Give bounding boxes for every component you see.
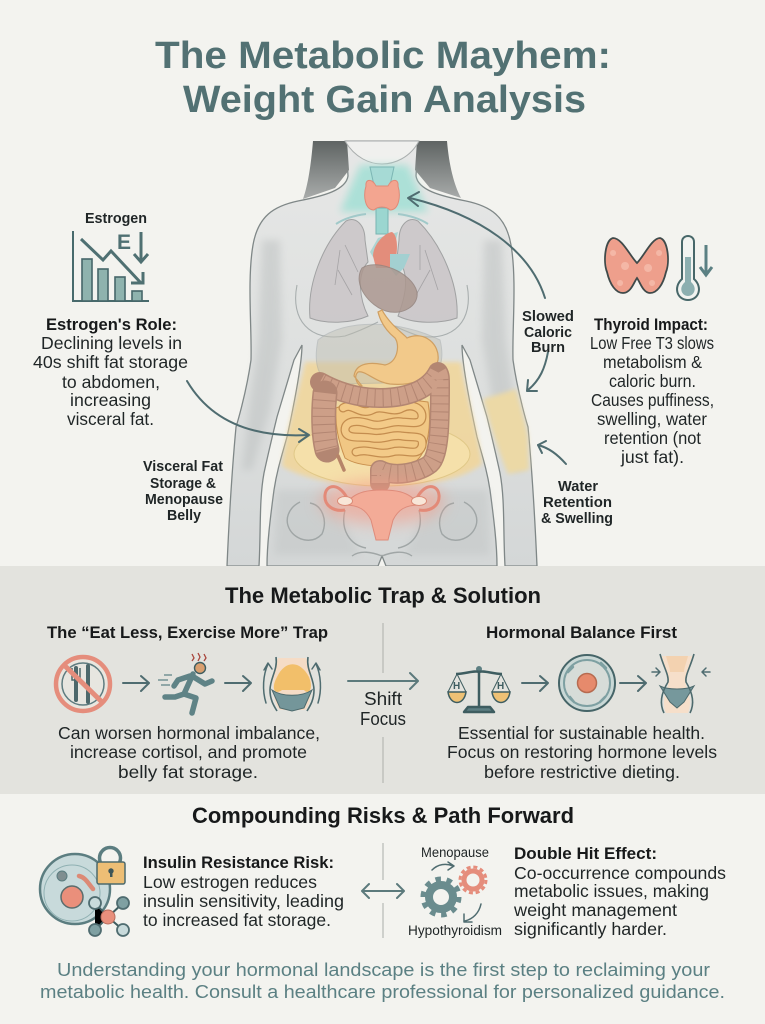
icon: cell bbox=[559, 655, 615, 711]
icon: belly with up arrows bbox=[264, 657, 320, 711]
label: water retention bbox=[541, 479, 613, 527]
label: slowed caloric burn: Slowed bbox=[522, 309, 574, 325]
arrow bbox=[522, 676, 548, 691]
small intestine bbox=[336, 400, 429, 466]
text: double hit: significantly harder. bbox=[514, 919, 667, 939]
text: thyroid impact: Causes puffiness, bbox=[591, 390, 714, 410]
text: insulin resistance: insulin sensitivity, leading bbox=[143, 891, 344, 911]
closing message bbox=[40, 959, 725, 1002]
arrow bbox=[123, 676, 149, 691]
label: visceral fat bbox=[143, 459, 223, 524]
label: visceral fat: Belly bbox=[167, 508, 201, 524]
icon: estrogen declining chart: Estrogen bbox=[85, 211, 147, 227]
arrow: to arm bbox=[527, 352, 548, 391]
trachea and thyroid bbox=[336, 167, 428, 234]
arrow: shift focus bbox=[348, 673, 418, 689]
text: thyroid impact: caloric burn. bbox=[609, 371, 696, 391]
liver and abdominal overlay bbox=[316, 324, 442, 384]
lungs bbox=[310, 220, 457, 322]
anatomical body illustration bbox=[227, 141, 537, 566]
text: trap description: increase cortisol, and promote bbox=[70, 742, 307, 762]
text: thyroid impact: Low Free T3 slows bbox=[590, 333, 714, 353]
text: thyroid impact: just fat). bbox=[620, 447, 684, 467]
icon: balance scales: H bbox=[453, 681, 460, 692]
label: water retention: Retention bbox=[543, 495, 612, 511]
pelvic bones bbox=[287, 502, 477, 556]
icon: estrogen declining chart: E bbox=[117, 231, 131, 254]
arrow bbox=[225, 676, 251, 691]
icon: balance scales: H bbox=[497, 681, 504, 692]
text: thyroid impact: retention (not bbox=[604, 428, 701, 448]
text: thyroid impact: Thyroid Impact: bbox=[594, 315, 708, 334]
closing message: metabolic health. Consult a healthcare professional for personalized guidance. bbox=[40, 981, 725, 1002]
divider bbox=[382, 843, 384, 938]
label: water retention: Water bbox=[558, 479, 598, 495]
subheading: trap: The “Eat Less, Exercise More” Trap bbox=[47, 623, 328, 642]
closing message: Understanding your hormonal landscape is the first step to reclaiming your bbox=[57, 959, 710, 980]
text: estrogen's role: Declining levels in bbox=[41, 333, 182, 353]
text: double hit: metabolic issues, making bbox=[514, 881, 709, 901]
breast contours bbox=[296, 285, 468, 337]
arrow: to water retention bbox=[538, 441, 566, 464]
text: balance description: before restrictive dieting. bbox=[484, 762, 680, 782]
stomach bbox=[354, 310, 438, 386]
uterus glow bbox=[320, 480, 444, 524]
icon: estrogen declining chart bbox=[73, 211, 149, 301]
text: thyroid impact bbox=[590, 315, 714, 467]
text: insulin resistance: to increased fat storage. bbox=[143, 910, 331, 930]
label: menopause: Menopause bbox=[421, 845, 489, 860]
text: trap description: Can worsen hormonal imbalance, bbox=[58, 723, 320, 743]
title: Weight Gain Analysis bbox=[183, 79, 586, 121]
icon: balance scales bbox=[448, 666, 510, 712]
text: insulin resistance: Low estrogen reduces bbox=[143, 872, 317, 892]
text: estrogen's role: 40s shift fat storage bbox=[33, 352, 188, 372]
text: double hit: Co-occurrence compounds bbox=[514, 863, 726, 883]
body silhouette bbox=[227, 141, 537, 566]
label: visceral fat: Storage & bbox=[150, 476, 216, 492]
title: The Metabolic Mayhem: bbox=[155, 35, 611, 77]
text: balance description: Focus on restoring hormone levels bbox=[447, 742, 717, 762]
subheading: balance: Hormonal Balance First bbox=[486, 623, 677, 642]
label: slowed caloric burn: Caloric bbox=[524, 325, 572, 341]
uterus bbox=[325, 487, 439, 540]
text: estrogen's role: visceral fat. bbox=[67, 409, 154, 429]
arrow: to belly fat bbox=[187, 381, 309, 442]
text: balance description: Essential for sustainable health. bbox=[458, 723, 705, 743]
heading: The Metabolic Trap & Solution bbox=[225, 583, 541, 608]
text: trap description bbox=[58, 723, 320, 782]
icon: slim waist bbox=[652, 654, 710, 713]
icon: no eating bbox=[56, 657, 110, 711]
right arm yellow patch bbox=[483, 389, 529, 474]
label: shift focus: Focus bbox=[360, 709, 406, 729]
label: visceral fat: Menopause bbox=[145, 492, 223, 508]
text: balance description bbox=[447, 723, 717, 782]
text: double hit: Double Hit Effect: bbox=[514, 844, 657, 863]
icon: insulin cell with lock bbox=[40, 848, 129, 936]
label: shift focus: Shift bbox=[364, 689, 402, 709]
text: insulin resistance bbox=[143, 853, 344, 930]
text: double hit bbox=[513, 844, 726, 939]
pelvic fat ellipse bbox=[294, 422, 470, 486]
label: hypothyroidism: Hypothyroidism bbox=[408, 923, 502, 938]
arrow: double-headed bbox=[362, 884, 404, 898]
text: thyroid impact: metabolism & bbox=[603, 352, 702, 372]
icon: thyroid and thermometer bbox=[605, 236, 712, 300]
colon bbox=[320, 372, 440, 483]
heart and vessels bbox=[359, 232, 417, 312]
text: insulin resistance: Insulin Resistance Risk: bbox=[143, 853, 334, 872]
arrow: to thyroid bbox=[408, 192, 545, 298]
label: slowed caloric burn bbox=[522, 309, 574, 356]
fat region bbox=[282, 362, 482, 486]
neck glow bbox=[340, 165, 428, 212]
hair bbox=[303, 141, 461, 199]
text: estrogen's role: increasing bbox=[70, 390, 151, 410]
text: double hit: weight management bbox=[513, 900, 677, 920]
arrow bbox=[620, 676, 646, 691]
icon: running person bbox=[158, 653, 212, 713]
body shading bbox=[242, 240, 522, 555]
panel: metabolic trap and solution bbox=[0, 566, 765, 794]
label: visceral fat: Visceral Fat bbox=[143, 459, 223, 475]
panel: compounding risks bbox=[40, 803, 726, 939]
text: trap description: belly fat storage. bbox=[118, 762, 258, 782]
text: estrogen's role: Estrogen's Role: bbox=[46, 315, 177, 334]
heading: Compounding Risks & Path Forward bbox=[192, 803, 574, 828]
label: shift focus bbox=[360, 689, 406, 729]
text: estrogen's role: to abdomen, bbox=[62, 372, 160, 392]
icon: gears bbox=[423, 862, 486, 922]
text: estrogen's role bbox=[33, 315, 188, 429]
label: water retention: & Swelling bbox=[541, 511, 613, 527]
divider bbox=[382, 623, 384, 783]
text: thyroid impact: swelling, water bbox=[597, 409, 707, 429]
chin bbox=[345, 141, 419, 164]
label: slowed caloric burn: Burn bbox=[531, 340, 565, 356]
title bbox=[155, 35, 611, 121]
